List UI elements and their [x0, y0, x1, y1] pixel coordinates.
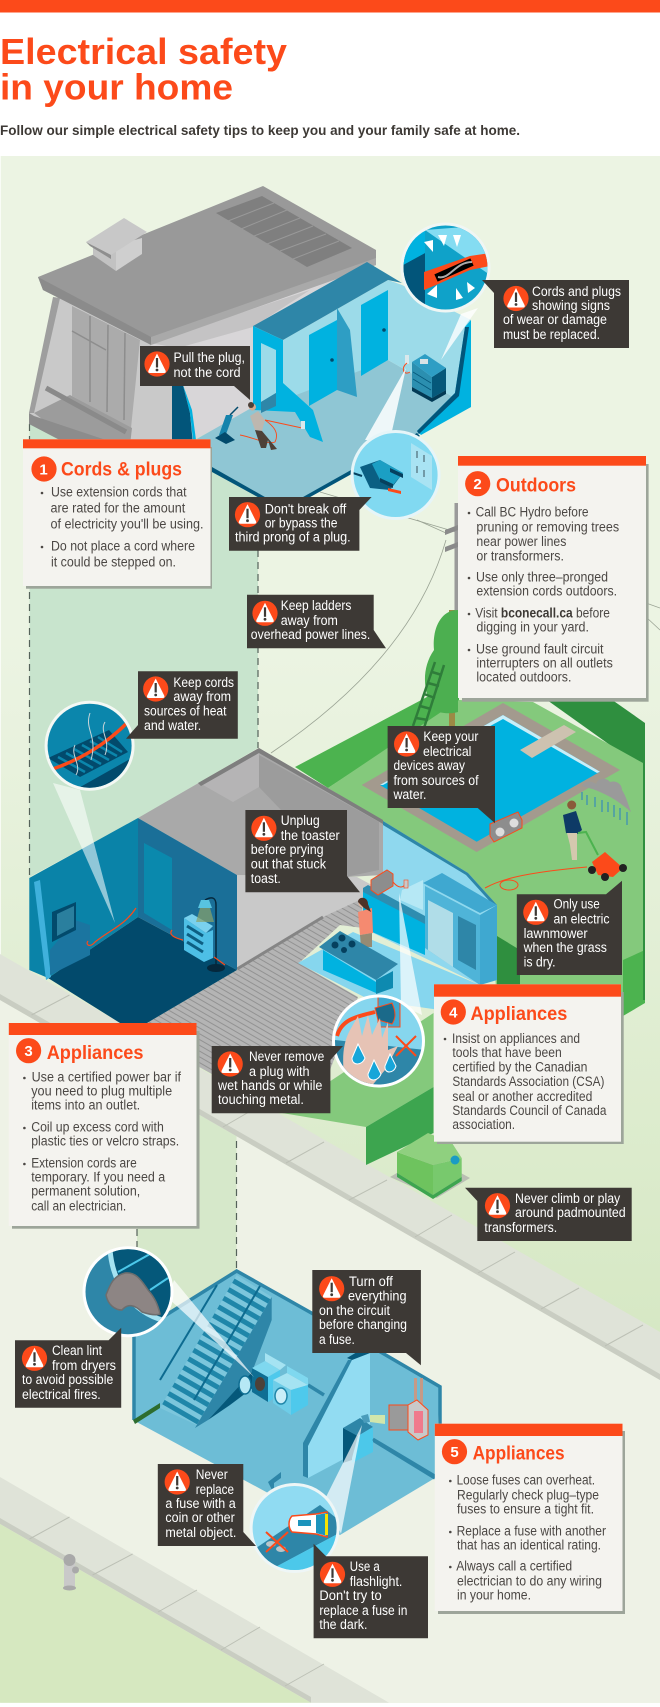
tips — [468, 505, 619, 685]
tips: seal or another accredited — [452, 1089, 592, 1104]
intro text: Follow our simple electrical safety tips to keep you and your family safe at home. — [0, 122, 520, 138]
callout: lawnmower: is dry. — [524, 955, 556, 970]
callout: third prong: third prong of a plug. — [235, 529, 351, 544]
callout: turn off circuit: before changing — [319, 1317, 407, 1332]
callout: flashlight: flashlight. — [350, 1574, 402, 1589]
icon: floor lamp — [196, 898, 225, 972]
upper house: doors — [309, 320, 337, 406]
basement — [133, 1270, 440, 1535]
person pulling plug — [240, 402, 305, 450]
number badge — [442, 1439, 467, 1464]
callout: never replace fuse: metal object. — [165, 1525, 236, 1540]
callout: wet hands: touching metal. — [218, 1092, 304, 1107]
tips: Use a certified power bar if — [32, 1070, 181, 1085]
callout: clean lint: electrical fires. — [22, 1387, 101, 1402]
panel: appliances 4 — [434, 984, 624, 1144]
top bar — [0, 0, 660, 12]
tips: Standards Council of Canada — [452, 1103, 607, 1118]
tips: Always call a certified — [456, 1559, 572, 1574]
heading: Cords & plugs — [61, 460, 182, 481]
basement: inner wall — [307, 1353, 370, 1478]
icon: ladder — [413, 662, 444, 728]
callout: lawnmower — [517, 881, 622, 975]
callout: wet hands: a plug with — [249, 1064, 310, 1079]
tips: you need to plug multiple — [31, 1084, 172, 1099]
tips: plastic ties or velcro straps. — [31, 1134, 179, 1149]
tips: Use only three–pronged — [476, 570, 608, 585]
callout: never replace fuse — [158, 1464, 256, 1546]
tips: Regularly check plug–type — [457, 1488, 599, 1503]
number badge: 5 — [450, 1444, 459, 1461]
tips: Do not place a cord where — [51, 539, 195, 554]
street sidewalks — [0, 954, 660, 1703]
tips: Extension cords are — [31, 1156, 137, 1171]
callout: toaster — [245, 810, 360, 892]
tips: permanent solution, — [31, 1184, 140, 1199]
icon: boombox — [490, 812, 522, 842]
man with lawnmower — [485, 800, 627, 890]
tips: Insist on appliances and — [452, 1031, 580, 1046]
callout: third prong: or bypass the — [265, 516, 338, 531]
icon: vacuum cleaner — [215, 407, 238, 444]
icon: washer and dryer — [239, 1353, 308, 1415]
yard: diving board — [520, 725, 576, 758]
tips: fuses to ensure a tight fit. — [457, 1502, 594, 1517]
callout: clean lint: to avoid possible — [22, 1372, 113, 1387]
title: in your home — [0, 66, 233, 108]
callout: ladders: Keep ladders — [281, 598, 352, 613]
number badge: 2 — [473, 476, 482, 493]
callout: third prong: Don't break off — [265, 501, 347, 516]
icon: television — [52, 902, 76, 942]
tips: in your home. — [457, 1588, 531, 1603]
yard — [282, 610, 645, 1165]
callout: wet hands: Never remove — [249, 1049, 324, 1064]
power lines and pole — [271, 492, 660, 753]
callout: lawnmower: Only use — [554, 897, 600, 912]
icon: water heater cabinet — [343, 1414, 385, 1463]
callout: lawnmower: an electric — [554, 912, 610, 927]
callout: clean lint — [15, 1328, 121, 1408]
icon: fuse panel — [389, 1378, 428, 1440]
tips: tools that have been — [452, 1045, 562, 1060]
panel: appliances 3 — [9, 1023, 199, 1229]
magnifier: floor grate — [44, 700, 135, 791]
callout: padmounted transformers: Never climb or play — [515, 1191, 620, 1206]
tips: pruning or removing trees — [476, 520, 619, 535]
middle house: kitchen floor patch — [298, 932, 480, 1010]
callout: flashlight: Don't try to — [319, 1588, 382, 1603]
magnifier cone: frayed cord — [441, 308, 478, 360]
tips: near power lines — [476, 534, 567, 549]
panel: outdoors — [458, 456, 649, 702]
callout: turn off circuit: everything — [348, 1288, 406, 1303]
callout: toaster: before prying — [251, 842, 324, 857]
tips — [23, 1070, 181, 1214]
callout: wet hands: wet hands or while — [217, 1078, 322, 1093]
callout: never replace fuse: a fuse with a — [165, 1496, 236, 1511]
magnifier cone: hand — [399, 893, 422, 1015]
callout: flashlight — [314, 1544, 428, 1638]
callout: devices and water — [388, 726, 495, 823]
callout: turn off circuit — [312, 1270, 421, 1365]
callout: heat and water: away from — [173, 689, 231, 704]
magnifier cone: floor grate — [53, 783, 115, 923]
tips: Replace a fuse with another — [457, 1524, 606, 1539]
callout: never replace fuse: Never — [196, 1467, 228, 1482]
tips — [41, 485, 204, 570]
tips: Use extension cords that — [51, 485, 187, 500]
number badge: 4 — [449, 1004, 458, 1022]
heading: Appliances — [473, 1444, 565, 1465]
magnifier: plug — [350, 430, 442, 520]
tips: that has an identical rating. — [457, 1538, 601, 1553]
tips: interrupters on all outlets — [476, 656, 613, 671]
number badge: 3 — [24, 1043, 33, 1060]
yard: hedge back walls — [295, 680, 459, 788]
callout: devices and water: from sources of — [394, 773, 479, 788]
upper house: roof — [38, 186, 376, 343]
magnifier cone: lint — [168, 1280, 254, 1377]
magnifier: dryer lint — [82, 1246, 174, 1337]
middle house: roof — [138, 748, 383, 877]
callout: heat and water: sources of heat — [144, 703, 227, 718]
callout: heat and water: Keep cords — [173, 675, 234, 690]
tips — [444, 1031, 607, 1132]
icon: dresser — [412, 354, 446, 402]
title: Electrical safety — [0, 31, 287, 72]
callout: never replace fuse: coin or other — [165, 1510, 235, 1525]
title — [0, 31, 287, 108]
tips: Call BC Hydro before — [476, 505, 589, 520]
padmount transformer — [390, 1133, 470, 1199]
upper house: ceiling and interior — [150, 263, 376, 440]
callout: devices and water: electrical — [423, 744, 471, 759]
upper house — [29, 186, 471, 501]
tips: or transformers. — [476, 549, 564, 564]
magnifier: frayed cord — [400, 222, 492, 315]
callout: flashlight: replace a fuse in — [319, 1603, 407, 1618]
callout: toaster: Unplug — [281, 813, 320, 828]
tips: are rated for the amount — [50, 501, 185, 516]
upper house: floor — [195, 360, 471, 497]
tips — [449, 1473, 606, 1603]
callout: cords and plugs damage: showing signs — [532, 298, 610, 313]
callout: lawnmower: when the grass — [523, 940, 607, 955]
middle house: kitchen deck — [147, 893, 363, 1113]
number badge — [16, 1038, 41, 1063]
tips: Coil up excess cord with — [31, 1120, 164, 1135]
tips: extension cords outdoors. — [476, 584, 617, 599]
callout: cords and plugs damage: of wear or damage — [503, 312, 607, 327]
dashed cutaway lines — [30, 424, 258, 1270]
callout: cords and plugs damage: must be replaced. — [503, 327, 600, 342]
kitchen island — [319, 931, 398, 994]
heading: Appliances — [470, 1004, 567, 1025]
callout: ladders: away from — [281, 613, 338, 628]
callout: padmounted transformers — [465, 1188, 632, 1241]
callout: toaster: out that stuck — [251, 857, 326, 872]
callout: ladders — [247, 595, 386, 648]
callout: clean lint: from dryers — [52, 1358, 116, 1373]
middle house: kitchen wall — [363, 821, 497, 985]
icon: tree — [425, 610, 458, 728]
callout: pull the plug: Pull the plug, — [174, 350, 245, 365]
callout: padmounted transformers: around padmounted — [515, 1205, 626, 1220]
magnifier cone: plug — [365, 368, 406, 440]
magnifier: wet hand — [332, 994, 425, 1090]
callout: flashlight: the dark. — [319, 1617, 367, 1632]
callout: clean lint: Clean lint — [52, 1343, 102, 1358]
heading: Outdoors — [496, 476, 576, 497]
upper house: grey side wall — [29, 296, 172, 445]
callout: pull the plug — [140, 346, 250, 400]
callout: toaster: the toaster — [281, 828, 340, 843]
tips: items into an outlet. — [31, 1098, 140, 1113]
callout: wet hands — [212, 1046, 343, 1113]
number badge — [441, 999, 466, 1025]
icon: chimney — [86, 218, 147, 271]
tips: temporary. If you need a — [31, 1170, 166, 1185]
callout: padmounted transformers: transformers. — [484, 1220, 557, 1235]
icon: rain cloud — [582, 779, 631, 825]
tips: association. — [452, 1117, 515, 1132]
icon: dresser — [184, 914, 213, 962]
tips: it could be stepped on. — [51, 555, 176, 570]
callout: turn off circuit: a fuse. — [319, 1332, 355, 1347]
callout: devices and water: water. — [393, 787, 426, 802]
panel: appliances 5 — [435, 1424, 625, 1614]
callout: flashlight: Use a — [350, 1559, 380, 1574]
yard: lawn — [328, 700, 643, 1003]
yard: front lawn and hedge — [282, 1013, 434, 1127]
tips: electrician to do any wiring — [457, 1574, 602, 1589]
callout: third prong — [229, 497, 372, 551]
magnifier cone: flashlight — [326, 1425, 362, 1534]
callout: turn off circuit: Turn off — [349, 1274, 393, 1289]
callout: devices and water: Keep your — [423, 729, 479, 744]
basement: stairs — [160, 1275, 272, 1425]
magnifier: flashlight and coins — [250, 1483, 340, 1573]
callout: heat and water — [126, 671, 238, 739]
tips: Visit bconecall.ca before — [475, 606, 610, 621]
icon: outlet and cord — [403, 355, 410, 373]
woman in kitchen — [358, 898, 373, 947]
number badge — [465, 471, 490, 496]
tips: certified by the Canadian — [452, 1060, 587, 1075]
panel: cords and plugs — [23, 439, 212, 589]
icon: toaster — [371, 870, 408, 895]
tips: call an electrician. — [31, 1199, 126, 1214]
callout: devices and water: devices away — [394, 758, 465, 773]
callout: ladders: overhead power lines. — [251, 627, 370, 642]
tips: Loose fuses can overheat. — [457, 1473, 595, 1488]
number badge: 1 — [39, 462, 48, 478]
tips: Standards Association (CSA) — [452, 1074, 604, 1089]
callout: never replace fuse: replace — [196, 1482, 234, 1497]
tips: located outdoors. — [476, 670, 571, 685]
callout: turn off circuit: on the circuit — [319, 1303, 390, 1318]
yard: pool — [362, 703, 620, 852]
icon: fire hydrant — [63, 1554, 79, 1590]
upper house: right wall — [417, 320, 471, 435]
number badge — [31, 456, 57, 482]
middle house — [29, 748, 497, 1113]
middle house: fridge unit — [423, 873, 497, 913]
tips: of electricity you'll be using. — [50, 517, 204, 532]
callout: heat and water: and water. — [144, 718, 201, 733]
tips: digging in your yard. — [476, 620, 589, 635]
callout: cords and plugs damage — [482, 280, 629, 348]
icon: cords on floor — [87, 908, 225, 965]
upper house: room walls — [283, 280, 471, 407]
tips: Use ground fault circuit — [476, 642, 604, 657]
callout: toaster: toast. — [251, 871, 281, 886]
heading: Appliances — [47, 1043, 144, 1064]
callout: cords and plugs damage: Cords and plugs — [532, 284, 621, 299]
middle house: grey wall — [237, 875, 381, 970]
middle house: dark room — [29, 818, 138, 978]
middle house: counter — [363, 890, 425, 955]
callout: pull the plug: not the cord — [174, 365, 240, 380]
callout: lawnmower: lawnmower — [524, 926, 588, 941]
